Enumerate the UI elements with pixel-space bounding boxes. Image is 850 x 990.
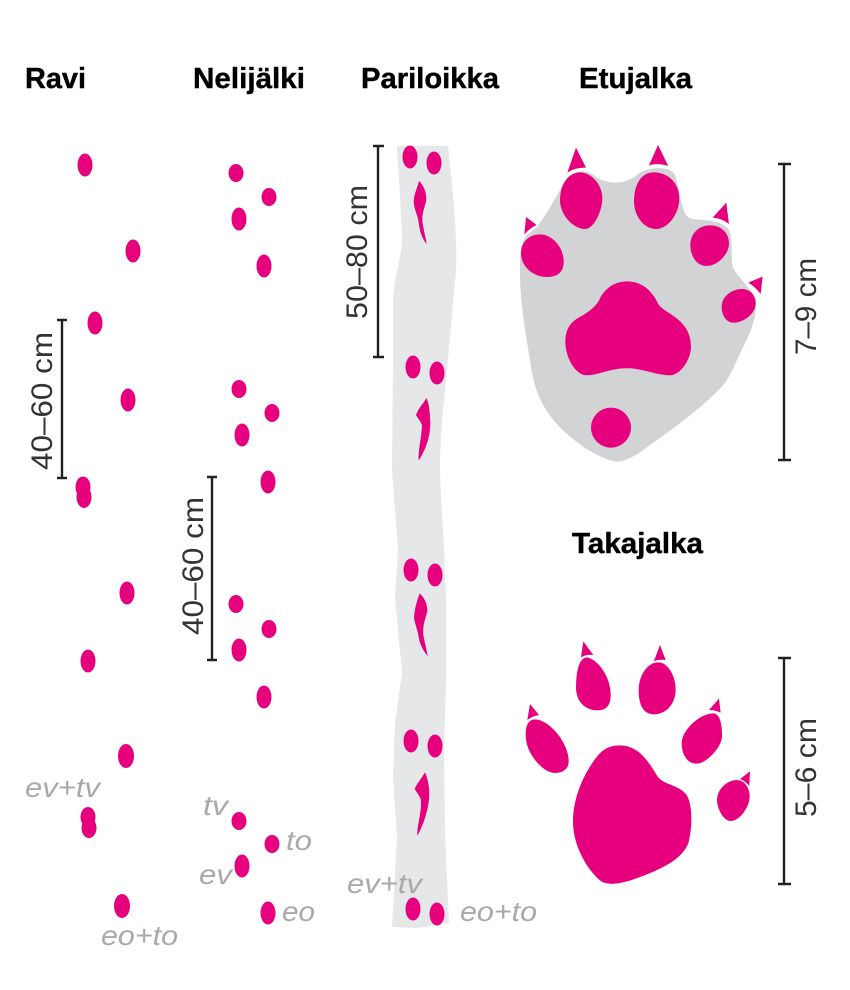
- measure bar: 40–60 cm: 40–60 cm: [26, 332, 59, 470]
- track trail: Ravi: [76, 154, 140, 918]
- heading: Ravi: Ravi: [25, 63, 86, 95]
- panel: Ravi: [25, 63, 178, 951]
- measure bar: 50–80 cm: [341, 146, 384, 357]
- foot label: ev: ev: [199, 859, 234, 890]
- panel: Takajalka: [526, 528, 823, 884]
- measure bar: 5–6 cm: [778, 658, 823, 884]
- panel: Pariloikka: [341, 63, 537, 928]
- measure bar: 5–6 cm: 5–6 cm: [790, 718, 823, 817]
- claws: [523, 145, 763, 296]
- heading: Takajalka: Takajalka: [572, 528, 704, 560]
- foot label: eo: eo: [282, 896, 315, 927]
- heading: Etujalka: Etujalka: [579, 63, 693, 95]
- measure bar: 40–60 cm: [26, 320, 67, 478]
- track band: [392, 146, 456, 928]
- track trail: Nelijälki: [228, 164, 280, 924]
- foot label: tv: tv: [203, 790, 230, 821]
- foot label: ev+tv: ev+tv: [347, 868, 424, 899]
- hind paw print: [526, 641, 750, 884]
- measure bar: 7–9 cm: [778, 164, 823, 460]
- heading: Nelijälki: Nelijälki: [193, 63, 305, 95]
- track trail: Pariloikka: [402, 146, 444, 926]
- heading: Pariloikka: Pariloikka: [361, 63, 500, 95]
- measure bar: 40–60 cm: 40–60 cm: [177, 497, 210, 635]
- foot label: eo+to: eo+to: [101, 920, 178, 951]
- measure bar: 50–80 cm: 50–80 cm: [341, 185, 374, 319]
- foot label: eo+to: eo+to: [460, 896, 537, 927]
- measure bar: 40–60 cm: [177, 477, 217, 660]
- measure bar: 7–9 cm: 7–9 cm: [790, 258, 823, 355]
- panel: Etujalka: [520, 63, 823, 462]
- foot label: to: to: [286, 825, 312, 856]
- panel: Nelijälki: [177, 63, 315, 927]
- paw sole: [520, 168, 756, 462]
- front paw print: [520, 145, 763, 462]
- foot label: ev+tv: ev+tv: [25, 772, 102, 803]
- toe and heel pads: [521, 172, 756, 448]
